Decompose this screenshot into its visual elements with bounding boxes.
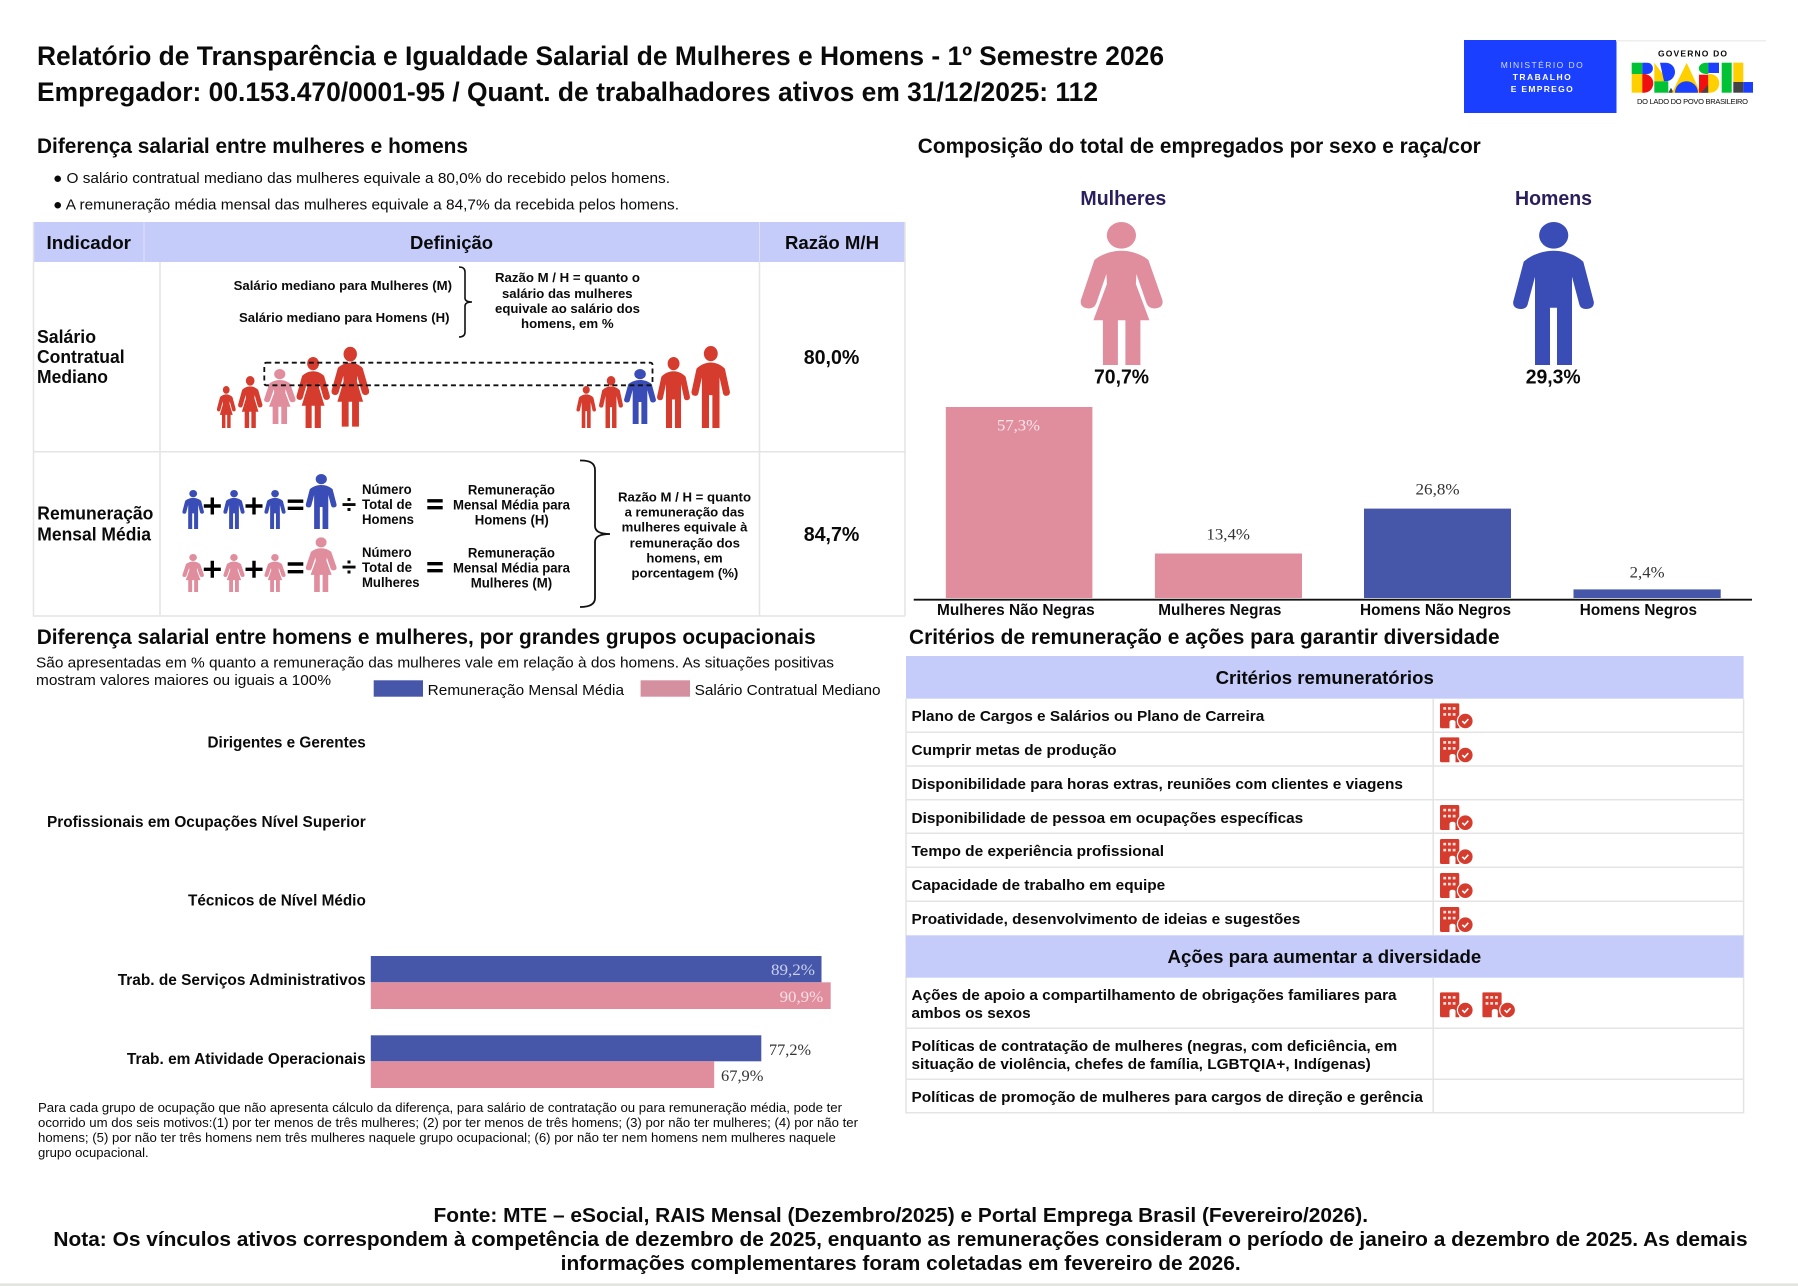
title: Relatório de Transparência e Igualdade Salarial de Mulheres e Homens - 1º Semestre 2026 <box>37 41 1164 71</box>
bar chart: grupos ocupacionais: 89,2% <box>771 962 815 979</box>
equation: homens: Homens (H) <box>475 512 549 527</box>
razão explanation 2: mulheres equivale à <box>622 519 748 534</box>
criteria labels: Disponibilidade para horas extras, reuniões com clientes e viagens <box>912 776 1403 793</box>
bullet points: ● A remuneração média mensal das mulheres equivale a 84,7% da recebida pelos homens. <box>53 196 679 214</box>
icon: woman <box>1081 222 1163 365</box>
criteria labels: Capacidade de trabalho em equipe <box>912 877 1165 894</box>
value: 80,0%: 80,0% <box>804 347 860 369</box>
row: remuneração mensal média label: Mensal Média <box>37 524 152 544</box>
equation: homens: ÷ <box>342 489 356 519</box>
row: salário contratual mediano label <box>37 327 125 387</box>
legend <box>374 680 881 699</box>
criteria labels: Plano de Cargos e Salários ou Plano de Carreira <box>912 708 1265 725</box>
bar chart: composição por raça: 26,8% <box>1416 482 1460 499</box>
bar chart: grupos ocupacionais: Dirigentes e Gerentes <box>208 734 366 752</box>
razão explanation 2: remuneração dos <box>630 535 740 550</box>
action labels: ambos os sexos <box>912 1005 1031 1022</box>
value: 29,3%: 29,3% <box>1526 366 1581 388</box>
razão explanation: salário das mulheres <box>502 286 633 301</box>
logo: Ministério do Trabalho e Emprego: TRABALHO <box>1513 72 1571 82</box>
bar chart: composição por raça: 13,4% <box>1206 526 1250 544</box>
table header <box>33 222 905 262</box>
table header: Razão M/H <box>785 233 879 253</box>
bar chart: composição por raça: Homens Negros <box>1580 602 1697 619</box>
equation: mulheres: Número <box>362 545 412 560</box>
bar chart: composição por raça: Homens Não Negros <box>1360 602 1511 619</box>
logo: Ministério do Trabalho e Emprego <box>1464 40 1616 113</box>
heading: critérios: Critérios de remuneração e ações para garantir diversidade <box>909 626 1500 649</box>
equation: homens: Homens <box>362 512 414 527</box>
heading: grupos ocupacionais: Diferença salarial entre homens e mulheres, por grandes grupos ocupacionais <box>37 626 816 649</box>
bar chart: composição por raça <box>914 407 1752 619</box>
footer: fonte e nota: Fonte: MTE – eSocial, RAIS Mensal (Dezembro/2025) e Portal Emprega Brasil (Fevereiro/2026). <box>434 1205 1368 1227</box>
razão explanation: homens, em % <box>521 316 614 331</box>
logo: Ministério do Trabalho e Emprego: E EMPREGO <box>1511 84 1573 94</box>
legend: Remuneração Mensal Média <box>428 682 625 699</box>
criteria labels <box>912 708 1403 928</box>
title: Empregador: 00.153.470/0001-95 / Quant. de trabalhadores ativos em 31/12/2025: 112 <box>37 77 1098 107</box>
razão explanation 2: porcentagem (%) <box>632 566 738 580</box>
razão explanation 2: a remuneração das <box>625 504 744 519</box>
bar chart: grupos ocupacionais: 90,9% <box>780 989 823 1006</box>
row: salário contratual mediano label: Contratual <box>37 347 125 367</box>
logo: Ministério do Trabalho e Emprego: MINISTÉRIO DO <box>1501 60 1583 70</box>
panel: mulheres: Mulheres <box>1080 188 1166 210</box>
footnote: ocorrido um dos seis motivos:(1) por ter menos de três mulheres; (2) por ter menos de três homens; (3) por não ter mulheres; (4) por não ter <box>38 1115 859 1130</box>
bar chart: grupos ocupacionais: Trab. de Serviços Administrativos <box>118 972 366 989</box>
heading: diferença salarial: Diferença salarial entre mulheres e homens <box>37 135 468 158</box>
definition labels <box>234 278 452 325</box>
title <box>37 41 1164 107</box>
panel: homens <box>1513 188 1594 388</box>
row: remuneração mensal média label <box>37 504 153 544</box>
table header: critérios remuneratórios <box>906 656 1744 699</box>
equation: mulheres: Mulheres (M) <box>471 575 552 590</box>
subtitle: grupos ocupacionais <box>36 656 834 689</box>
action labels: Ações de apoio a compartilhamento de obrigações familiares para <box>912 987 1397 1004</box>
row: salário contratual mediano label: Mediano <box>37 367 108 387</box>
razão explanation <box>495 270 640 331</box>
icons: building with check <box>1440 703 1516 1018</box>
action labels: Políticas de contratação de mulheres (negras, com deficiência, em <box>912 1038 1397 1055</box>
subtitle: grupos ocupacionais: São apresentadas em % quanto a remuneração das mulheres vale em relação à dos homens. As situações positivas <box>36 656 834 672</box>
bullet points <box>53 170 679 214</box>
definition labels: Salário mediano para Homens (H) <box>239 310 450 325</box>
bar chart: grupos ocupacionais: 67,9% <box>721 1068 764 1085</box>
legend: Salário Contratual Mediano <box>695 682 881 699</box>
razão explanation 2: Razão M / H = quanto <box>618 489 751 504</box>
row: remuneração mensal média label: Remuneração <box>37 504 153 524</box>
value: 70,7%: 70,7% <box>1094 366 1149 388</box>
action labels: Políticas de promoção de mulheres para cargos de direção e gerência <box>912 1089 1424 1106</box>
panel: mulheres <box>1080 188 1166 388</box>
footnote <box>38 1100 859 1160</box>
razão explanation 2: homens, em <box>646 550 723 565</box>
icon: men median line-up <box>576 346 730 428</box>
brace <box>459 267 472 337</box>
table header: ações: Ações para aumentar a diversidade <box>1168 947 1481 967</box>
bar chart: composição por raça: 57,3% <box>997 418 1040 434</box>
criteria labels: Cumprir metas de produção <box>912 742 1116 759</box>
panel: tabela de indicadores <box>33 222 905 616</box>
bar chart: composição por raça: Mulheres Negras <box>1158 602 1281 619</box>
footnote: Para cada grupo de ocupação que não apresenta cálculo da diferença, para salário de contratação ou para remuneração média, pode ter <box>38 1100 843 1115</box>
footnote: grupo ocupacional. <box>38 1145 149 1160</box>
table header: ações <box>906 935 1744 978</box>
equation: mulheres: Mulheres <box>362 575 420 590</box>
icon: women median line-up <box>217 347 369 428</box>
logo: Governo do Brasil <box>1616 40 1766 106</box>
equation: homens: Número <box>362 482 412 497</box>
equation: homens: Mensal Média para <box>453 497 570 512</box>
table header: Definição <box>410 233 493 253</box>
value: 84,7%: 84,7% <box>804 524 860 546</box>
equation: homens <box>182 474 570 529</box>
bar chart: grupos ocupacionais: Técnicos de Nível Médio <box>188 892 366 910</box>
footnote: homens; (5) por não ter três homens nem três mulheres naquele grupo ocupacional; (6) por não ter nem homens nem mulheres naquele <box>38 1130 836 1145</box>
equation: mulheres: ÷ <box>342 552 356 582</box>
equation: mulheres: Remuneração <box>468 545 555 560</box>
footer: fonte e nota <box>53 1205 1748 1275</box>
criteria labels: Disponibilidade de pessoa em ocupações específicas <box>912 810 1303 827</box>
bar chart: grupos ocupacionais: Trab. em Atividade Operacionais <box>127 1051 366 1068</box>
row: salário contratual mediano label: Salário <box>37 327 96 347</box>
logo: Governo do Brasil: DO LADO DO POVO BRASILEIRO <box>1637 97 1748 106</box>
dashed highlight box <box>264 363 652 385</box>
table header: Indicador <box>46 233 131 253</box>
large brace <box>580 460 610 607</box>
action labels: situação de violência, chefes de família, LGBTQIA+, Indígenas) <box>912 1056 1371 1073</box>
bar chart: grupos ocupacionais: 77,2% <box>769 1042 811 1059</box>
equation: mulheres: Total de <box>362 560 412 575</box>
icon: man <box>1513 222 1594 365</box>
razão explanation 2 <box>618 489 751 580</box>
footer: fonte e nota: informações complementares foram coletadas em fevereiro de 2026. <box>561 1253 1241 1275</box>
equation: homens: Remuneração <box>468 482 555 497</box>
criteria labels: Tempo de experiência profissional <box>912 843 1164 860</box>
bar chart: composição por raça: Mulheres Não Negras <box>937 602 1095 619</box>
table header: critérios remuneratórios: Critérios remuneratórios <box>1216 668 1434 688</box>
panel: critérios e ações <box>906 656 1744 1113</box>
panel: homens: Homens <box>1515 188 1592 210</box>
bar chart: grupos ocupacionais: Profissionais em Ocupações Nível Superior <box>47 814 366 831</box>
logo: Governo do Brasil: GOVERNO DO <box>1658 48 1727 58</box>
heading: composição: Composição do total de empregados por sexo e raça/cor <box>918 135 1481 158</box>
razão explanation: equivale ao salário dos <box>495 301 640 316</box>
footer: fonte e nota: Nota: Os vínculos ativos correspondem à competência de dezembro de 2025, enquanto as remunerações consideram o período de janeiro a dezembro de 2025. As demais <box>53 1229 1748 1251</box>
equation: homens: Total de <box>362 497 412 512</box>
equation: mulheres <box>182 537 570 592</box>
bar chart: grupos ocupacionais <box>47 734 831 1088</box>
action labels <box>912 987 1424 1106</box>
bar chart: composição por raça: 2,4% <box>1630 564 1665 581</box>
equation: mulheres: Mensal Média para <box>453 560 570 575</box>
subtitle: grupos ocupacionais: mostram valores maiores ou iguais a 100% <box>36 673 331 689</box>
bullet points: ● O salário contratual mediano das mulheres equivale a 80,0% do recebido pelos homens. <box>53 170 670 187</box>
criteria labels: Proatividade, desenvolvimento de ideias e sugestões <box>912 911 1300 928</box>
razão explanation: Razão M / H = quanto o <box>495 270 640 285</box>
definition labels: Salário mediano para Mulheres (M) <box>234 278 452 293</box>
